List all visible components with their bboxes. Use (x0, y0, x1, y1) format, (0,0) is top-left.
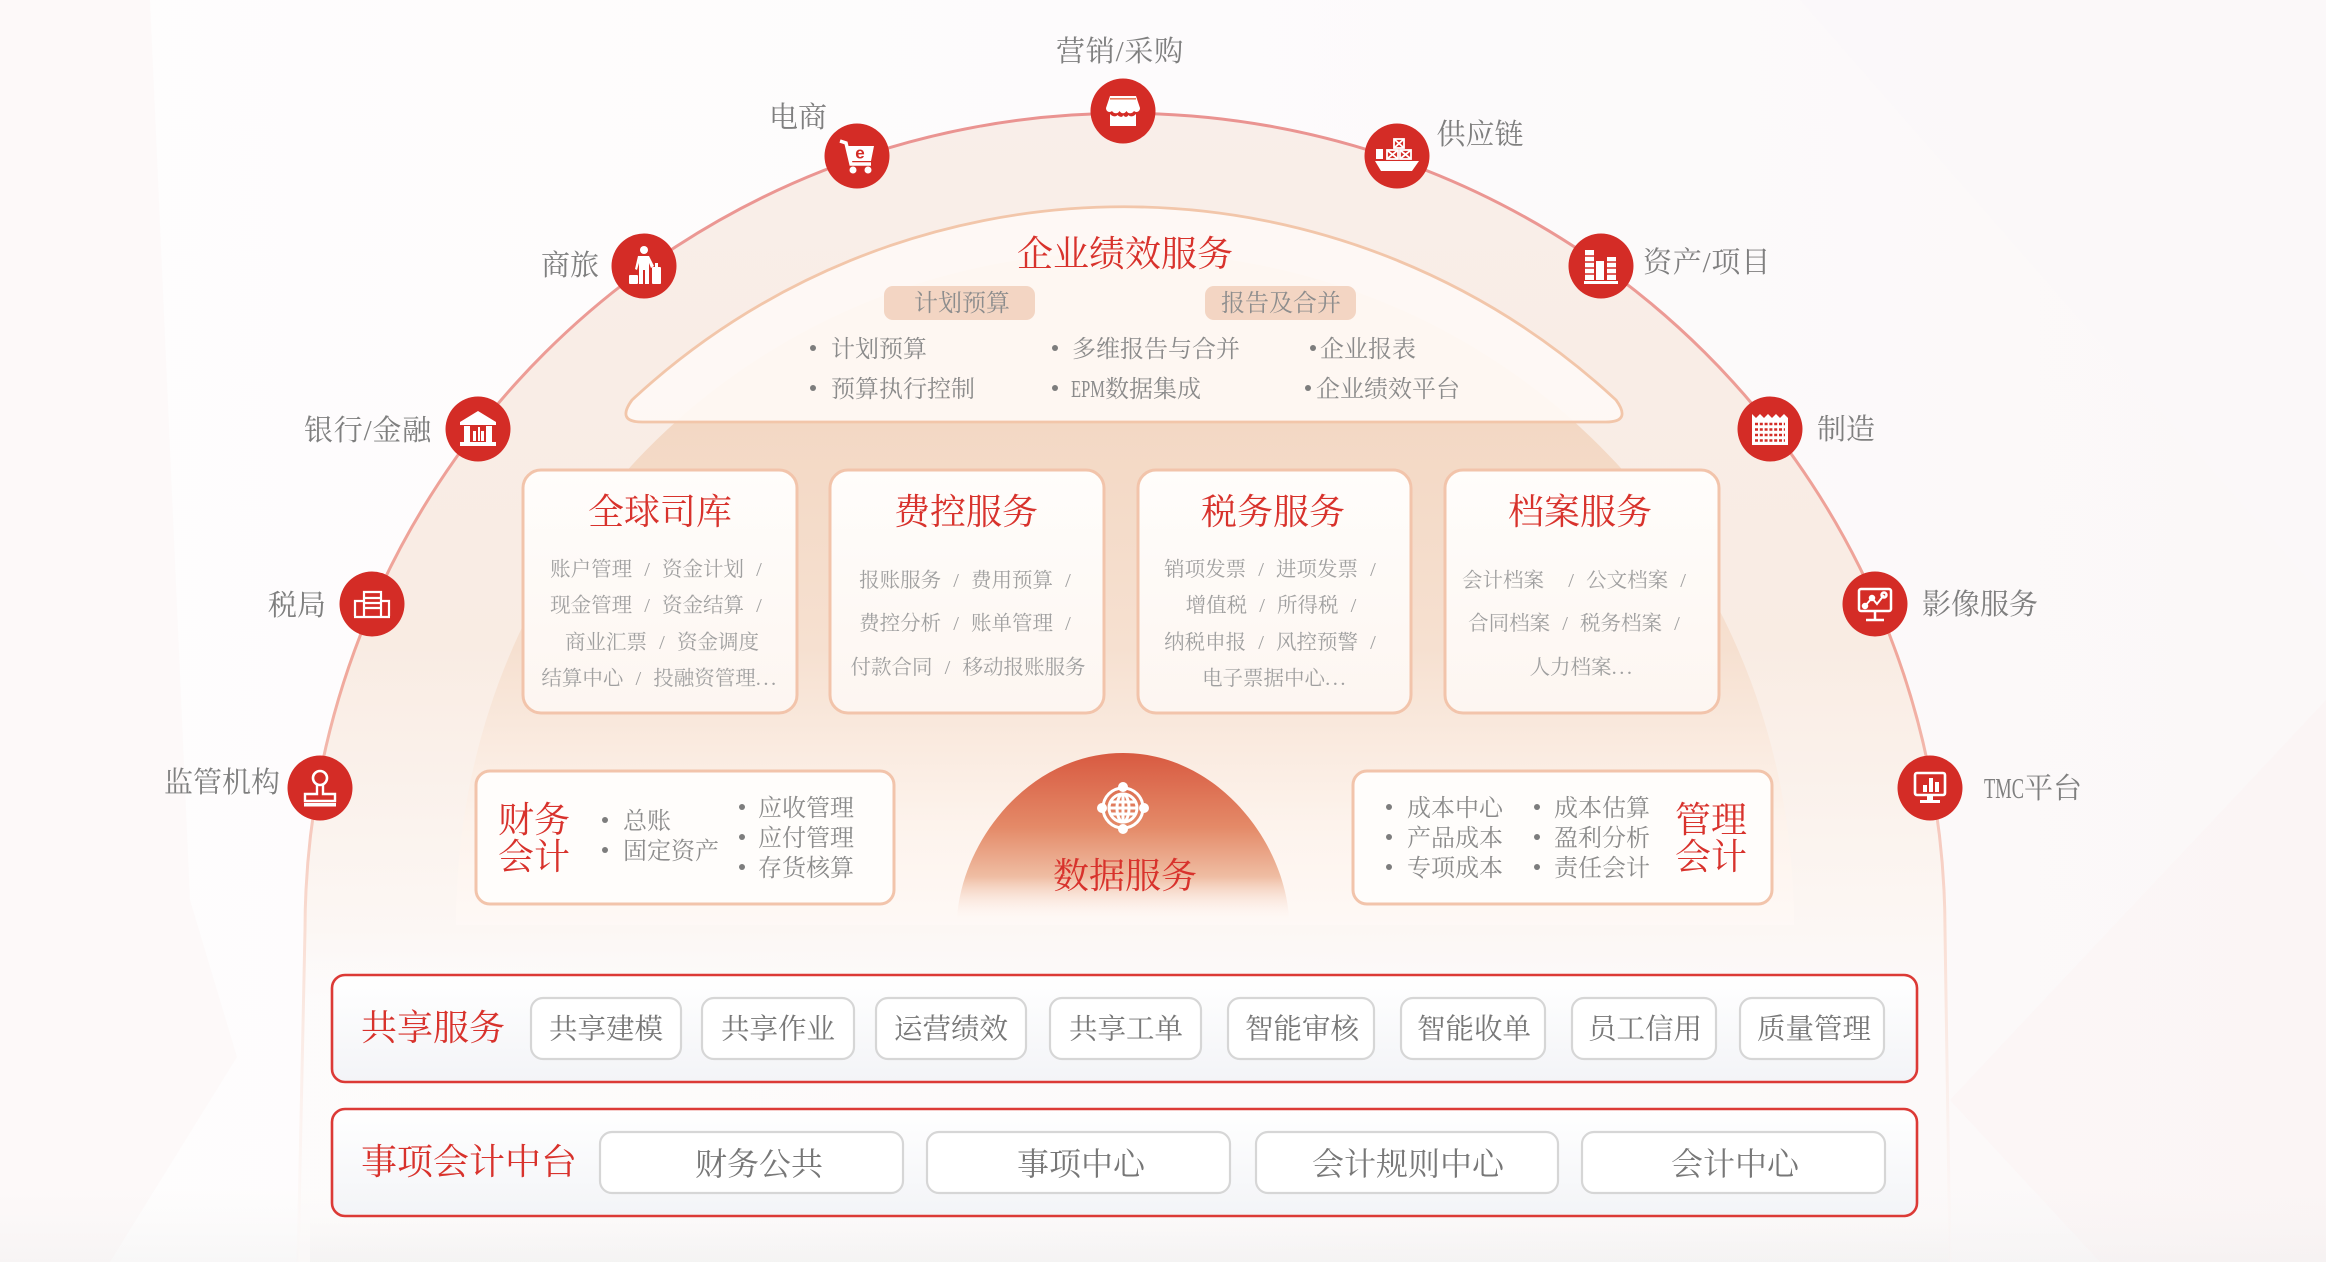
heading: management accounting: 会计 (1675, 837, 1747, 877)
pill: planning and budget (884, 286, 1035, 320)
node: imaging services: 影像服务 (1922, 588, 2038, 621)
text: archive items: 合同档案 / 税务档案 / (1468, 612, 1680, 635)
panel: event accounting platform (332, 1109, 1917, 1216)
node: e-commerce: 电商 (769, 101, 827, 134)
icon: tax office (340, 572, 404, 636)
list: cost centers (1386, 795, 1504, 882)
chip: event center (927, 1132, 1230, 1193)
heading: financial accounting: 财务 (498, 800, 570, 840)
text: expense items (851, 569, 1085, 679)
icon: cargo ship (1364, 124, 1430, 188)
text: treasury items: 现金管理 / 资金结算 / (550, 594, 762, 617)
text: tax items: 电子票据中心... (1202, 667, 1348, 690)
chip: quality management (1740, 998, 1884, 1059)
heading: global treasury: 全球司库 (588, 492, 732, 532)
list: estimates and analysis: 盈利分析 (1554, 825, 1650, 852)
list: cost centers: 产品成本 (1407, 825, 1503, 852)
heading: management accounting (1675, 800, 1747, 877)
chip: shared operations (702, 998, 854, 1059)
text: tax items: 销项发票 / 进项发票 / (1164, 558, 1376, 581)
icon: storefront (1090, 78, 1156, 144)
chip: event center: 事项中心 (1017, 1146, 1146, 1182)
list: reporting items: 多维报告与合并 (1072, 336, 1240, 363)
list: cost centers: 成本中心 (1407, 795, 1504, 822)
chip: accounting rules center (1256, 1132, 1558, 1193)
node: assets and projects: 资产/项目 (1643, 246, 1771, 279)
icon: bank (446, 396, 510, 462)
panel: archive services (1445, 470, 1719, 713)
chip: smart receipt: 智能收单 (1417, 1014, 1531, 1046)
chip: finance public (600, 1132, 903, 1193)
node: supply chain (1364, 118, 1524, 188)
list: cost centers: 专项成本 (1407, 855, 1503, 882)
text: treasury items (541, 558, 779, 690)
node: manufacturing (1738, 396, 1875, 462)
chip: smart audit (1228, 998, 1374, 1059)
panel: shared services (332, 975, 1917, 1082)
panel: tax services (1138, 470, 1411, 713)
chip: smart audit: 智能审核 (1245, 1014, 1360, 1046)
pill: reporting and consolidation (1205, 286, 1356, 320)
icon: stamp (288, 756, 352, 820)
list: planning items: 预算执行控制 (831, 376, 975, 403)
list: estimates and analysis: 成本估算 (1554, 795, 1650, 822)
list: estimates and analysis (1534, 795, 1650, 882)
chip: smart receipt (1401, 998, 1545, 1059)
list: receivables and payables (739, 795, 854, 882)
node: TMC platform (1898, 756, 2082, 820)
node: marketing and procurement: 营销/采购 (1056, 35, 1184, 68)
node: business travel: 商旅 (541, 249, 599, 282)
heading: tax services: 税务服务 (1201, 492, 1345, 532)
node: regulators: 监管机构 (164, 766, 280, 799)
list: reporting items: EPM数据集成 (1071, 376, 1201, 403)
chip: accounting rules center: 会计规则中心 (1312, 1146, 1505, 1182)
chip: finance public: 财务公共 (695, 1146, 823, 1182)
chip: shared operations: 共享作业 (721, 1014, 835, 1046)
pill: reporting and consolidation: 报告及合并 (1221, 290, 1341, 317)
text: archive items (1462, 569, 1686, 679)
node: regulators (164, 756, 352, 820)
node: assets and projects (1568, 234, 1771, 298)
chip: shared work orders (1050, 998, 1201, 1059)
panel: global treasury (523, 470, 797, 713)
node: banking and finance: 银行/金融 (304, 414, 432, 447)
text: archive items: 人力档案... (1530, 656, 1634, 679)
node: imaging services (1842, 572, 2038, 636)
heading: shared services: 共享服务 (361, 1008, 505, 1048)
list: ledger and assets: 总账 (623, 808, 671, 835)
chip: employee credit (1572, 998, 1716, 1059)
chip: employee credit: 员工信用 (1588, 1014, 1702, 1046)
list: estimates and analysis: 责任会计 (1554, 855, 1650, 882)
list: enterprise report items: 企业报表 (1320, 336, 1416, 363)
heading: archive services: 档案服务 (1508, 492, 1652, 532)
node: e-commerce (769, 101, 890, 188)
node: manufacturing: 制造 (1817, 413, 1875, 446)
chip: operating performance (876, 998, 1026, 1059)
text: expense items: 费控分析 / 账单管理 / (859, 612, 1071, 635)
heading: event accounting platform: 事项会计中台 (361, 1142, 577, 1182)
text: tax items: 纳税申报 / 风控预警 / (1164, 631, 1376, 654)
node: tax bureau: 税局 (268, 589, 326, 622)
panel: financial accounting (476, 771, 894, 904)
text: treasury items: 账户管理 / 资金计划 / (550, 558, 762, 581)
chip: accounting center (1582, 1132, 1885, 1193)
chip: operating performance: 运营绩效 (894, 1014, 1008, 1046)
chip: quality management: 质量管理 (1757, 1014, 1871, 1046)
list: ledger and assets: 固定资产 (623, 838, 719, 865)
list: planning items (810, 336, 975, 403)
text: tax items (1164, 558, 1376, 690)
heading: enterprise performance: 企业绩效服务 (1017, 234, 1233, 274)
node: TMC platform: TMC平台 (1984, 772, 2082, 805)
text: expense items: 付款合同 / 移动报账服务 (851, 656, 1085, 679)
heading: expense control: 费控服务 (894, 492, 1038, 532)
list: enterprise report items: 企业绩效平台 (1316, 376, 1460, 403)
text: treasury items: 结算中心 / 投融资管理... (541, 667, 779, 690)
heading: financial accounting (498, 800, 570, 877)
icon: traveler with luggage (612, 234, 676, 298)
list: reporting items (1052, 336, 1240, 403)
chip: shared modeling: 共享建模 (549, 1014, 663, 1046)
inner peach arch (456, 252, 1794, 925)
icon: globe (1098, 784, 1148, 832)
icon: buildings (1568, 234, 1634, 298)
list: ledger and assets (602, 808, 719, 865)
text: treasury items: 商业汇票 / 资金调度 (565, 631, 759, 654)
panel: expense control (830, 470, 1104, 713)
node: banking and finance (304, 396, 510, 462)
icon: monitor chart (1842, 572, 1908, 636)
heading: data services: 数据服务 (1053, 856, 1197, 896)
outer arch (298, 113, 1950, 1262)
icon: factory calendar (1738, 396, 1802, 462)
icon: monitor with bars (1898, 756, 1962, 820)
heading: financial accounting: 会计 (498, 837, 570, 877)
list: enterprise report items (1305, 336, 1460, 403)
heading: management accounting: 管理 (1675, 800, 1747, 840)
panel: enterprise performance services (626, 207, 1622, 422)
list: receivables and payables: 应收管理 (758, 795, 854, 822)
panel: management accounting (1353, 771, 1772, 904)
chip: shared work orders: 共享工单 (1069, 1014, 1183, 1046)
text: archive items: 会计档案 / 公文档案 / (1462, 569, 1686, 592)
pill: planning and budget: 计划预算 (914, 290, 1010, 317)
list: receivables and payables: 存货核算 (758, 855, 854, 882)
node: business travel (541, 234, 676, 298)
node: tax bureau (268, 572, 404, 636)
text: tax items: 增值税 / 所得税 / (1186, 594, 1357, 617)
node: marketing and procurement (1056, 35, 1184, 144)
chip: accounting center: 会计中心 (1671, 1146, 1800, 1182)
chip: shared modeling (531, 998, 681, 1059)
node: supply chain: 供应链 (1436, 118, 1524, 151)
panel: data services dome (957, 753, 1289, 918)
text: expense items: 报账服务 / 费用预算 / (859, 569, 1071, 592)
list: planning items: 计划预算 (831, 336, 927, 363)
list: receivables and payables: 应付管理 (758, 825, 854, 852)
icon: shopping cart: e (855, 144, 865, 162)
